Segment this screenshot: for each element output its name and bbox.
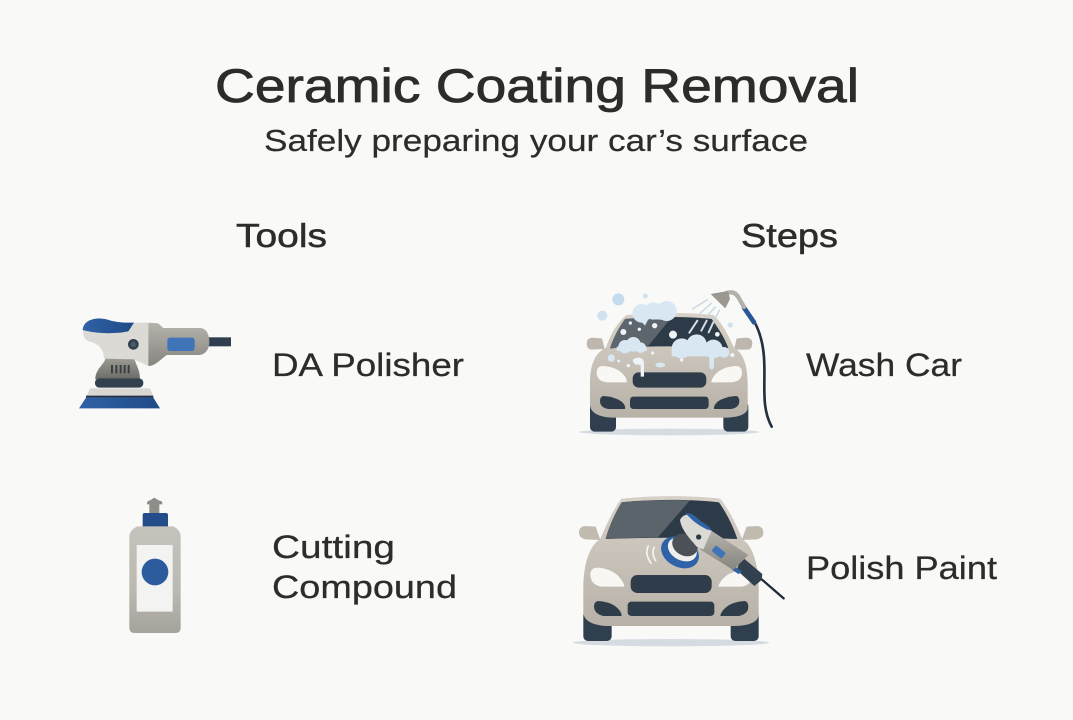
subtitle: Safely preparing your car’s surface (264, 123, 808, 158)
title: Ceramic Coating Removal (215, 59, 859, 112)
label: Cutting Compound (272, 529, 457, 605)
heading: tools: Tools (236, 217, 327, 254)
icon: compound bottle (129, 498, 181, 633)
heading: steps: Steps (741, 217, 838, 254)
label: Wash Car: Wash Car (806, 347, 962, 383)
label: Polish Paint: Polish Paint (806, 550, 997, 586)
label: Cutting Compound: Compound (272, 569, 457, 605)
icon: DA polisher (79, 318, 231, 408)
icon: car being washed (579, 291, 772, 435)
label: Cutting Compound: Cutting (272, 529, 395, 565)
label: DA Polisher: DA Polisher (272, 347, 464, 383)
icon: car being polished (573, 496, 784, 646)
